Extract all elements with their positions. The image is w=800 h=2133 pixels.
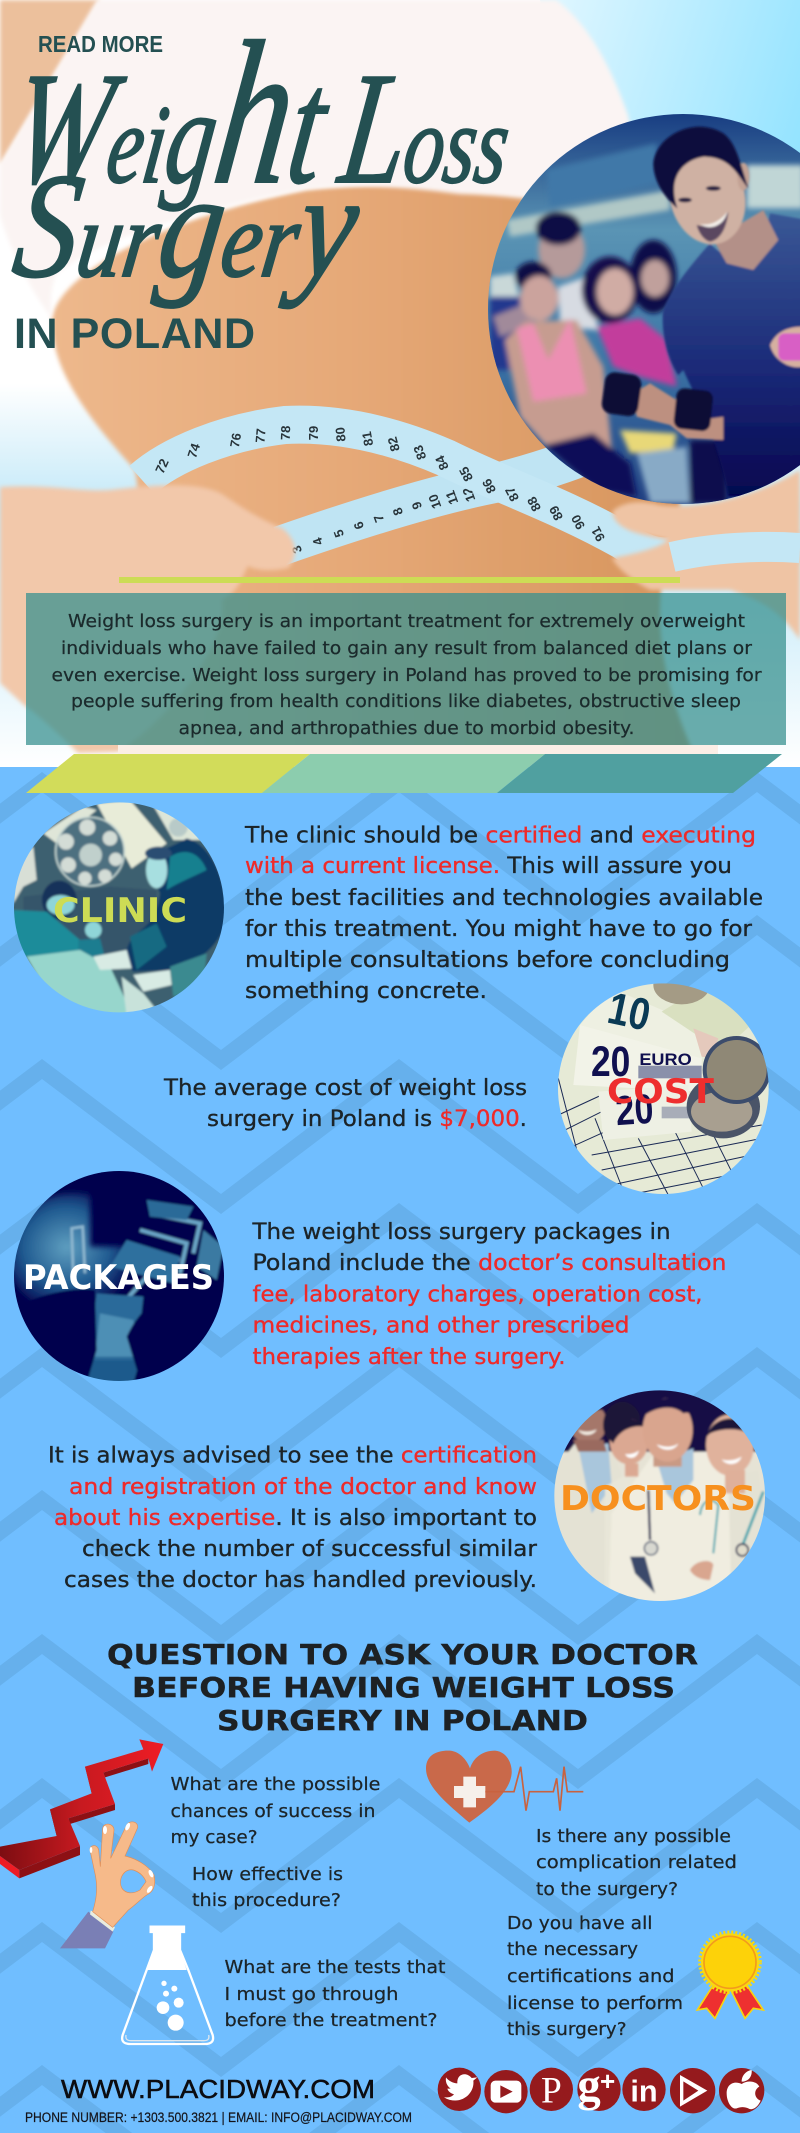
cost label: COST <box>607 1072 715 1112</box>
clinic text: the best facilities and technologies available <box>245 886 763 911</box>
social icons <box>438 2060 764 2113</box>
tape numbers upper band: 77 <box>252 428 269 443</box>
google plus <box>577 2060 621 2112</box>
tape numbers lower band: 6 <box>350 520 367 532</box>
tape numbers lower band: 9 <box>408 500 425 512</box>
tape numbers lower band: 12 <box>459 485 478 504</box>
tape numbers upper band: 94 <box>651 553 666 568</box>
question: tests: I must go through <box>224 1984 398 2005</box>
tape numbers upper band: 96 <box>699 544 716 559</box>
questions heading <box>107 1638 698 1737</box>
question: chances of success: What are the possible <box>170 1774 380 1795</box>
clinic text: The clinic should be certified and executing <box>244 824 756 848</box>
packages text: medicines, and other prescribed <box>252 1314 630 1338</box>
tape numbers lower band: 10 <box>425 492 444 511</box>
packages text: The weight loss surgery packages in <box>251 1220 670 1245</box>
question: effectiveness <box>192 1864 343 1911</box>
script title line 2: Surgery <box>5 143 369 309</box>
tape back band <box>280 440 620 546</box>
google plus: + <box>600 2066 615 2096</box>
tape numbers lower band: 3 <box>288 544 305 556</box>
cost photo circle: EURO <box>639 1050 692 1069</box>
doctors text: check the number of successful similar <box>82 1537 538 1562</box>
tape end over right hand <box>672 547 800 557</box>
tape numbers lower band: 5 <box>330 528 347 540</box>
blue page background with chevrons <box>0 638 800 2133</box>
icon: gold medal <box>697 1932 763 2018</box>
questions heading: QUESTION TO ASK YOUR DOCTOR <box>107 1638 698 1671</box>
intro box <box>26 593 786 745</box>
website: WWW.PLACIDWAY.COM <box>61 2074 375 2104</box>
tape numbers upper band: 78 <box>278 425 293 440</box>
tape numbers lower band <box>292 488 476 554</box>
tape numbers upper band: 89 <box>546 503 566 523</box>
clinic text: for this treatment. You might have to go for <box>245 917 753 942</box>
cost text: The average cost of weight loss <box>163 1076 527 1101</box>
clinic label: CLINIC <box>53 891 187 931</box>
google plus: g <box>577 2060 601 2112</box>
tape numbers upper band: 83 <box>410 443 429 462</box>
question: certifications: certifications and <box>507 1966 674 1987</box>
read more: READ MORE <box>38 31 163 57</box>
doctors text <box>48 1444 538 1593</box>
man in blue shirt <box>600 127 800 497</box>
question: certifications <box>507 1913 683 2040</box>
icon: heart with cross and pulse <box>426 1751 583 1823</box>
clinic text <box>244 824 763 1004</box>
cost photo circle: 10 <box>604 982 655 1041</box>
doctors text: about his expertise . It is also important to <box>54 1506 537 1531</box>
clinic text: multiple consultations before concluding <box>245 948 730 973</box>
tape numbers upper band: 91 <box>588 524 608 544</box>
doctors text: It is always advised to see the certification <box>48 1444 537 1468</box>
question: certifications: license to perform <box>507 1993 683 2014</box>
linkedin <box>622 2068 666 2111</box>
tape numbers upper band: 85 <box>456 464 476 484</box>
packages photo circle <box>14 1171 224 1381</box>
white top <box>0 0 650 318</box>
question: effectiveness: this procedure? <box>192 1890 341 1911</box>
script title line 1: Weight Loss <box>2 0 529 227</box>
right hand <box>612 470 800 640</box>
packages text: therapies after the surgery. <box>252 1345 566 1370</box>
tape numbers upper band: 90 <box>568 512 588 532</box>
packages label: PACKAGES <box>23 1258 214 1298</box>
left hand and arm <box>0 485 295 753</box>
packages text: Poland include the doctor’s consultation <box>252 1251 726 1276</box>
apple <box>719 2068 764 2113</box>
youtube <box>484 2070 528 2113</box>
tape numbers lower band: 8 <box>389 506 406 518</box>
question: tests <box>224 1957 446 2031</box>
clinic text: something concrete. <box>245 979 487 1004</box>
play store <box>670 2068 715 2113</box>
question: complications: to the surgery? <box>536 1879 678 1900</box>
intro box: individuals who have failed to gain any result from balanced diet plans or <box>61 638 753 659</box>
cost text: surgery in Poland is $7,000. <box>207 1107 527 1132</box>
question: chances of success <box>170 1774 380 1848</box>
contact line: PHONE NUMBER: +1303.500.3821 | EMAIL: INFO@PLACIDWAY.COM <box>25 2110 412 2125</box>
tape front band <box>142 425 800 556</box>
tape numbers upper band: 80 <box>332 427 349 442</box>
icon: red rising arrow <box>0 1739 163 1878</box>
pinterest: P <box>541 2071 562 2112</box>
doctors text: and registration of the doctor and know <box>69 1475 537 1500</box>
cost photo circle: 20 <box>591 1038 630 1086</box>
tape numbers lower band: 11 <box>442 489 461 507</box>
cost text <box>163 1076 527 1132</box>
tape numbers upper band: 88 <box>524 494 544 514</box>
question: certifications: Do you have all <box>507 1913 652 1934</box>
tape numbers upper band: 87 <box>502 484 522 504</box>
question: complications: Is there any possible <box>536 1826 731 1847</box>
cost photo circle <box>558 983 769 1194</box>
tape numbers upper band: 72 <box>152 456 172 476</box>
tape numbers upper band: 86 <box>479 476 499 496</box>
icon: flask <box>122 1927 213 2044</box>
tape numbers lower band: 4 <box>309 535 326 548</box>
cost photo circle: 20 <box>614 1085 655 1134</box>
tape numbers upper band: 97 <box>727 542 744 557</box>
question: certifications: the necessary <box>507 1939 638 1960</box>
left woman <box>602 1402 642 1440</box>
question: chances of success: chances of success in <box>170 1801 376 1822</box>
pinterest <box>530 2068 573 2112</box>
questions heading: SURGERY IN POLAND <box>217 1704 588 1737</box>
icon: OK hand <box>60 1822 155 1948</box>
left man <box>572 1408 607 1442</box>
shoulder skin <box>0 0 100 165</box>
doctors photo circle <box>554 1390 765 1601</box>
hero photo: waist and measuring tape <box>0 0 800 767</box>
tape numbers upper band: 76 <box>227 432 244 449</box>
divider line <box>119 577 680 583</box>
lower hem <box>118 745 718 767</box>
tape numbers upper band: 81 <box>359 430 376 447</box>
tape numbers lower band: 7 <box>370 513 387 525</box>
title <box>2 0 529 358</box>
question: tests: What are the tests that <box>224 1957 446 1978</box>
packages text <box>251 1220 726 1370</box>
banknotes <box>580 992 702 1058</box>
doctors label: DOCTORS <box>560 1479 756 1519</box>
coins <box>653 984 708 1004</box>
tape numbers upper band: 79 <box>306 426 321 440</box>
intro box: Weight loss surgery is an important treatment for extremely overweight <box>68 611 745 632</box>
question: certifications: this surgery? <box>507 2019 626 2040</box>
linkedin: in <box>630 2074 658 2108</box>
centre man <box>652 1456 683 1468</box>
intro box: even exercise. Weight loss surgery in Poland has proved to be promising for <box>52 665 762 686</box>
gym photo circle <box>483 110 800 510</box>
rate table <box>558 1078 762 1195</box>
blurred gym interior <box>490 143 800 503</box>
tape numbers upper band <box>155 426 604 542</box>
doctors text: cases the doctor has handled previously. <box>64 1568 537 1593</box>
tape numbers upper band: 74 <box>184 441 203 460</box>
question: tests: before the treatment? <box>224 2010 438 2031</box>
twitter <box>438 2068 481 2111</box>
in poland: IN POLAND <box>14 310 255 358</box>
intro box: apnea, and arthropathies due to morbid obesity. <box>178 718 634 739</box>
question: chances of success: my case? <box>170 1827 258 1848</box>
clinic text: with a current license. This will assure you <box>245 854 732 879</box>
question: complications: complication related <box>536 1852 737 1873</box>
packages text: fee, laboratory charges, operation cost, <box>252 1282 702 1308</box>
question: complications <box>536 1826 737 1900</box>
intro box: people suffering from health conditions like diabetes, obstructive sleep <box>71 691 741 712</box>
tape numbers upper band: 82 <box>385 435 403 453</box>
question: effectiveness: How effective is <box>192 1864 343 1885</box>
questions heading: BEFORE HAVING WEIGHT LOSS <box>132 1671 675 1704</box>
right woman <box>706 1414 754 1476</box>
abdomen <box>52 184 700 767</box>
clinic photo circle <box>14 802 224 1012</box>
coloured band <box>26 754 782 793</box>
tape numbers upper band: 84 <box>432 452 452 473</box>
